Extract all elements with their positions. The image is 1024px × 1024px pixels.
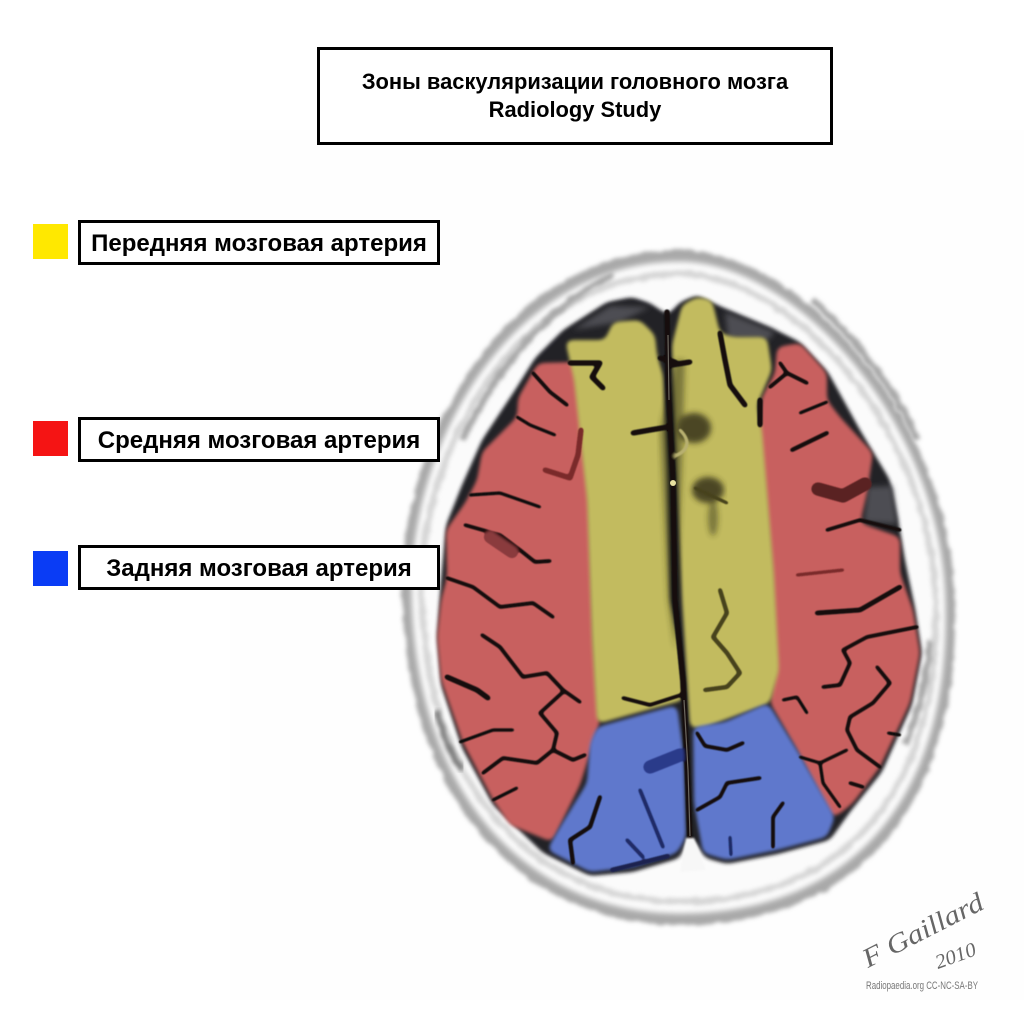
title box <box>317 47 833 145</box>
sulci <box>447 312 917 870</box>
interhemispheric fissure <box>667 312 690 838</box>
bright vessel dot <box>670 480 676 486</box>
region: right anterior cerebral artery <box>672 297 779 728</box>
legend swatch: yellow <box>33 224 68 259</box>
region: right posterior cerebral artery <box>693 703 835 860</box>
region: left anterior cerebral artery <box>565 320 684 724</box>
sulci right middle territory <box>770 363 917 807</box>
region: left posterior cerebral artery <box>547 705 686 872</box>
title box: Зоны васкуляризации головного мозга <box>362 69 788 94</box>
brain territories <box>437 297 920 872</box>
legend label: anterior <box>78 220 440 265</box>
legend label: anterior: Передняя мозговая артерия <box>91 230 427 256</box>
brain dark base <box>437 295 922 876</box>
legend label: middle <box>78 417 440 462</box>
falx highlight <box>668 335 690 836</box>
region: right middle cerebral artery <box>758 343 920 818</box>
falx gap <box>680 838 706 872</box>
meningeal grey areas <box>573 306 897 524</box>
legend label: posterior <box>78 545 440 590</box>
yellow shading <box>660 360 724 650</box>
region: left middle cerebral artery <box>437 362 600 842</box>
legend swatch: red <box>33 421 68 456</box>
legend label: middle: Средняя мозговая артерия <box>98 426 420 454</box>
sulci anterior territory <box>570 333 760 705</box>
skull <box>402 250 955 925</box>
sulci posterior territory <box>570 733 783 870</box>
legend swatch: blue <box>33 551 68 586</box>
credit: Radiopaedia.org CC-NC-SA-BY <box>866 980 978 992</box>
title box: Radiology Study <box>489 97 661 122</box>
signature: F Gaillard <box>856 886 989 974</box>
signature: 2010 <box>932 939 979 974</box>
sulci left middle territory <box>447 373 585 800</box>
legend label: posterior: Задняя мозговая артерия <box>106 554 412 582</box>
